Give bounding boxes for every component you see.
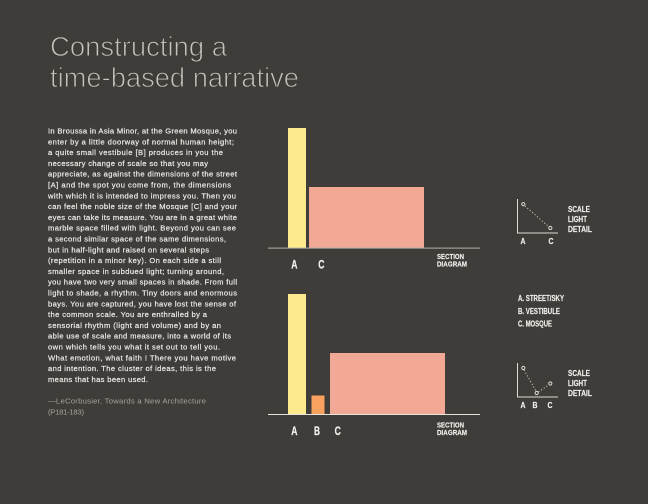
section diagram label: SECTION bbox=[437, 420, 464, 430]
scale light detail key, top: SCALE bbox=[568, 205, 591, 214]
body text: quotation: own which tells you what it set out to tell you. bbox=[48, 342, 220, 352]
line chart: A, B, C bbox=[518, 363, 558, 410]
citation: —LeCorbusier, Towards a New Architecture bbox=[48, 396, 206, 406]
section diagram: A and C bbox=[268, 128, 480, 272]
legend bbox=[518, 294, 565, 328]
bar labels: B bbox=[314, 424, 320, 438]
title: time-based narrative bbox=[50, 62, 299, 93]
body text: quotation: a quite small vestibule [B] produces in you the bbox=[48, 148, 223, 157]
bar: A street bbox=[288, 128, 306, 248]
scale light detail key, bottom bbox=[568, 369, 592, 398]
body text: quotation: marble space filled with light. Beyond you can see bbox=[48, 224, 236, 233]
section diagram: A, B and C bbox=[268, 294, 480, 438]
section diagram label bbox=[437, 420, 467, 437]
body text: quotation: smaller space in subdued light; turning around, bbox=[48, 267, 224, 276]
body text: quotation: necessary change of scale so that you may bbox=[48, 159, 208, 168]
body text: quotation: means that has been used. bbox=[48, 375, 148, 384]
body text: quotation: sensorial rhythm (light and volume) and by an bbox=[48, 321, 221, 330]
section diagram label: SECTION bbox=[437, 252, 464, 261]
body text: quotation: enter by a little doorway of normal human height; bbox=[48, 137, 234, 146]
bar labels: C bbox=[335, 424, 341, 438]
legend: C. MOSQUE bbox=[518, 320, 552, 328]
line chart: A, B, C: A bbox=[520, 401, 526, 410]
bar labels: A bbox=[291, 424, 298, 438]
line chart: A to C: C bbox=[548, 237, 554, 246]
body text: quotation: can feel the noble size of the Mosque [C] and your bbox=[48, 202, 237, 211]
body text: quotation: able use of scale and measure, into a world of its bbox=[48, 332, 231, 341]
section diagram label: DIAGRAM bbox=[437, 428, 467, 437]
body text: quotation: bays. You are captured, you have lost the sense of bbox=[48, 299, 237, 308]
scale light detail key, bottom: LIGHT bbox=[568, 379, 587, 388]
legend: A. STREET/SKY bbox=[518, 294, 565, 303]
bar labels bbox=[291, 424, 341, 438]
body text: quotation: [A] and the spot you come from, the dimensions bbox=[48, 180, 231, 190]
bar: B vestibule bbox=[312, 396, 324, 414]
legend: B. VESTIBULE bbox=[518, 307, 560, 316]
scale light detail key, top: DETAIL bbox=[568, 225, 592, 234]
body text: quotation: but in half-light and raised on several steps bbox=[48, 245, 209, 254]
bar labels bbox=[291, 258, 325, 272]
bar labels: C bbox=[318, 258, 325, 272]
scale light detail key, top bbox=[568, 205, 592, 234]
line chart: A to C: A bbox=[520, 237, 526, 246]
citation: (P181-183) bbox=[48, 408, 84, 416]
body text: quotation: a second similar space of the same dimensions, bbox=[48, 234, 226, 244]
title: Constructing a bbox=[50, 31, 228, 62]
body text: quotation: (repetition in a minor key). On each side a still bbox=[48, 256, 221, 265]
body text: quotation: and intention. The cluster of ideas, this is the bbox=[48, 364, 216, 373]
scale light detail key, bottom: DETAIL bbox=[568, 389, 592, 398]
section diagram label bbox=[437, 252, 467, 268]
line chart: A to C bbox=[518, 199, 558, 246]
scale light detail key, top: LIGHT bbox=[568, 215, 587, 224]
bar: C mosque bbox=[330, 353, 445, 414]
line chart: A, B, C: C bbox=[548, 401, 553, 410]
scale light detail key, bottom: SCALE bbox=[568, 369, 591, 378]
body text: quotation: the common scale. You are enthralled by a bbox=[48, 310, 208, 319]
ground line bbox=[268, 248, 480, 249]
ground line bbox=[268, 414, 480, 415]
bar: C mosque bbox=[309, 187, 424, 248]
body text: quotation: with which it is intended to impress you. Then you bbox=[47, 191, 236, 200]
body text: quotation: What emotion, what faith ! There you have motive bbox=[48, 353, 236, 362]
bar labels: A bbox=[291, 258, 298, 272]
body text: quotation bbox=[47, 126, 238, 384]
citation bbox=[48, 396, 206, 416]
title bbox=[50, 31, 299, 93]
body text: quotation: In Broussa in Asia Minor, at the Green Mosque, you bbox=[48, 126, 237, 136]
bar: A street bbox=[288, 294, 306, 414]
body text: quotation: light to shade, a rhythm. Tiny doors and enormous bbox=[48, 288, 237, 298]
section diagram label: DIAGRAM bbox=[437, 260, 467, 268]
body text: quotation: appreciate, as against the dimensions of the street bbox=[48, 170, 238, 179]
body text: quotation: eyes can take its measure. You are in a great white bbox=[48, 213, 237, 222]
line chart: A, B, C: B bbox=[532, 401, 538, 410]
body text: quotation: you have two very small spaces in shade. From full bbox=[48, 278, 237, 287]
